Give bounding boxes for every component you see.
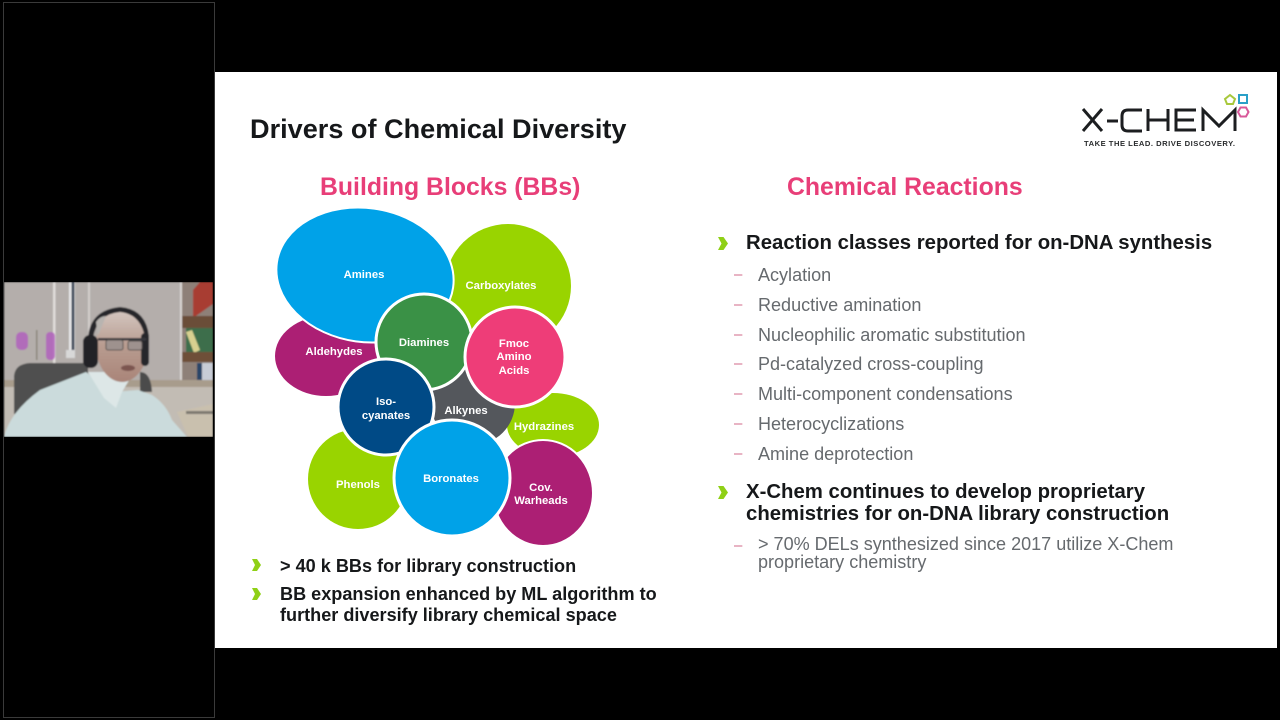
list: reaction classes: Pd-catalyzed cross-coupling xyxy=(758,354,984,374)
text: proprietary statistic xyxy=(734,534,1173,572)
text: proprietary statistic: – xyxy=(734,537,742,554)
bubble chart: building block classes: Amino xyxy=(496,351,532,363)
text: BB expansion: further diversify library chemical space xyxy=(280,605,617,625)
logo: X-Chem: TAKE THE LEAD. DRIVE DISCOVERY. xyxy=(1084,139,1235,148)
list: reaction classes: Reductive amination xyxy=(758,295,921,315)
bubble chart: building block classes: Amines xyxy=(344,269,384,281)
bubble chart: building block classes: Warheads xyxy=(514,495,568,507)
list: reaction classes xyxy=(734,265,1026,464)
list: reaction classes: – xyxy=(734,296,742,313)
list: reaction classes: – xyxy=(734,266,742,283)
bubble chart: building block classes: Boronates xyxy=(423,473,479,485)
bubble chart: building block classes: Iso- xyxy=(376,396,396,408)
heading: Chemical Reactions: Chemical Reactions xyxy=(787,174,1023,201)
list: reaction classes: – xyxy=(734,445,742,462)
text: BB expansion: BB expansion enhanced by ML algorithm to xyxy=(280,584,657,604)
heading: Building Blocks: Building Blocks (BBs) xyxy=(320,174,580,201)
list: reaction classes: Heterocyclizations xyxy=(758,414,904,434)
text: reaction classes heading: Reaction classes reported for on-DNA synthesis xyxy=(746,232,1212,254)
bubble chart: building block classes: Diamines xyxy=(399,337,449,349)
bubble chart: building block classes: Phenols xyxy=(336,479,380,491)
bubble chart: building block classes: Cov. xyxy=(529,482,553,494)
logo: X-Chem xyxy=(1082,94,1250,148)
list: reaction classes: – xyxy=(734,355,742,372)
text: proprietary chemistries xyxy=(746,481,1169,525)
bubble chart: building block classes: Fmoc xyxy=(499,338,529,350)
text: BB count: > 40 k BBs for library construction xyxy=(280,556,576,576)
webcam panel: presenter xyxy=(3,2,215,718)
list: reaction classes: Multi-component condensations xyxy=(758,384,1013,404)
slide panel xyxy=(215,72,1277,648)
list: reaction classes: – xyxy=(734,326,742,343)
bubble chart: building block classes: Carboxylates xyxy=(466,280,536,292)
text: BB expansion xyxy=(280,584,657,625)
list: reaction classes: Nucleophilic aromatic substitution xyxy=(758,325,1026,345)
list: reaction classes: Acylation xyxy=(758,265,831,285)
list: reaction classes: – xyxy=(734,415,742,432)
text: proprietary chemistries: chemistries for on-DNA library construction xyxy=(746,503,1169,525)
bubble chart: building block classes: Alkynes xyxy=(444,405,488,417)
text: proprietary chemistries: X-Chem continues to develop proprietary xyxy=(746,481,1145,503)
text: proprietary statistic: proprietary chemistry xyxy=(758,552,926,572)
list: reaction classes: – xyxy=(734,385,742,402)
list: reaction classes: Amine deprotection xyxy=(758,444,913,464)
title: Drivers of Chemical Diversity xyxy=(250,113,626,144)
text: proprietary statistic: > 70% DELs synthesized since 2017 utilize X-Chem xyxy=(758,534,1173,554)
bubble chart: building block classes: Hydrazines xyxy=(514,421,574,433)
bubble chart: building block classes: Acids xyxy=(499,365,529,377)
bubble chart: building block classes: Aldehydes xyxy=(305,346,363,358)
bubble chart: building block classes: cyanates xyxy=(362,410,410,422)
